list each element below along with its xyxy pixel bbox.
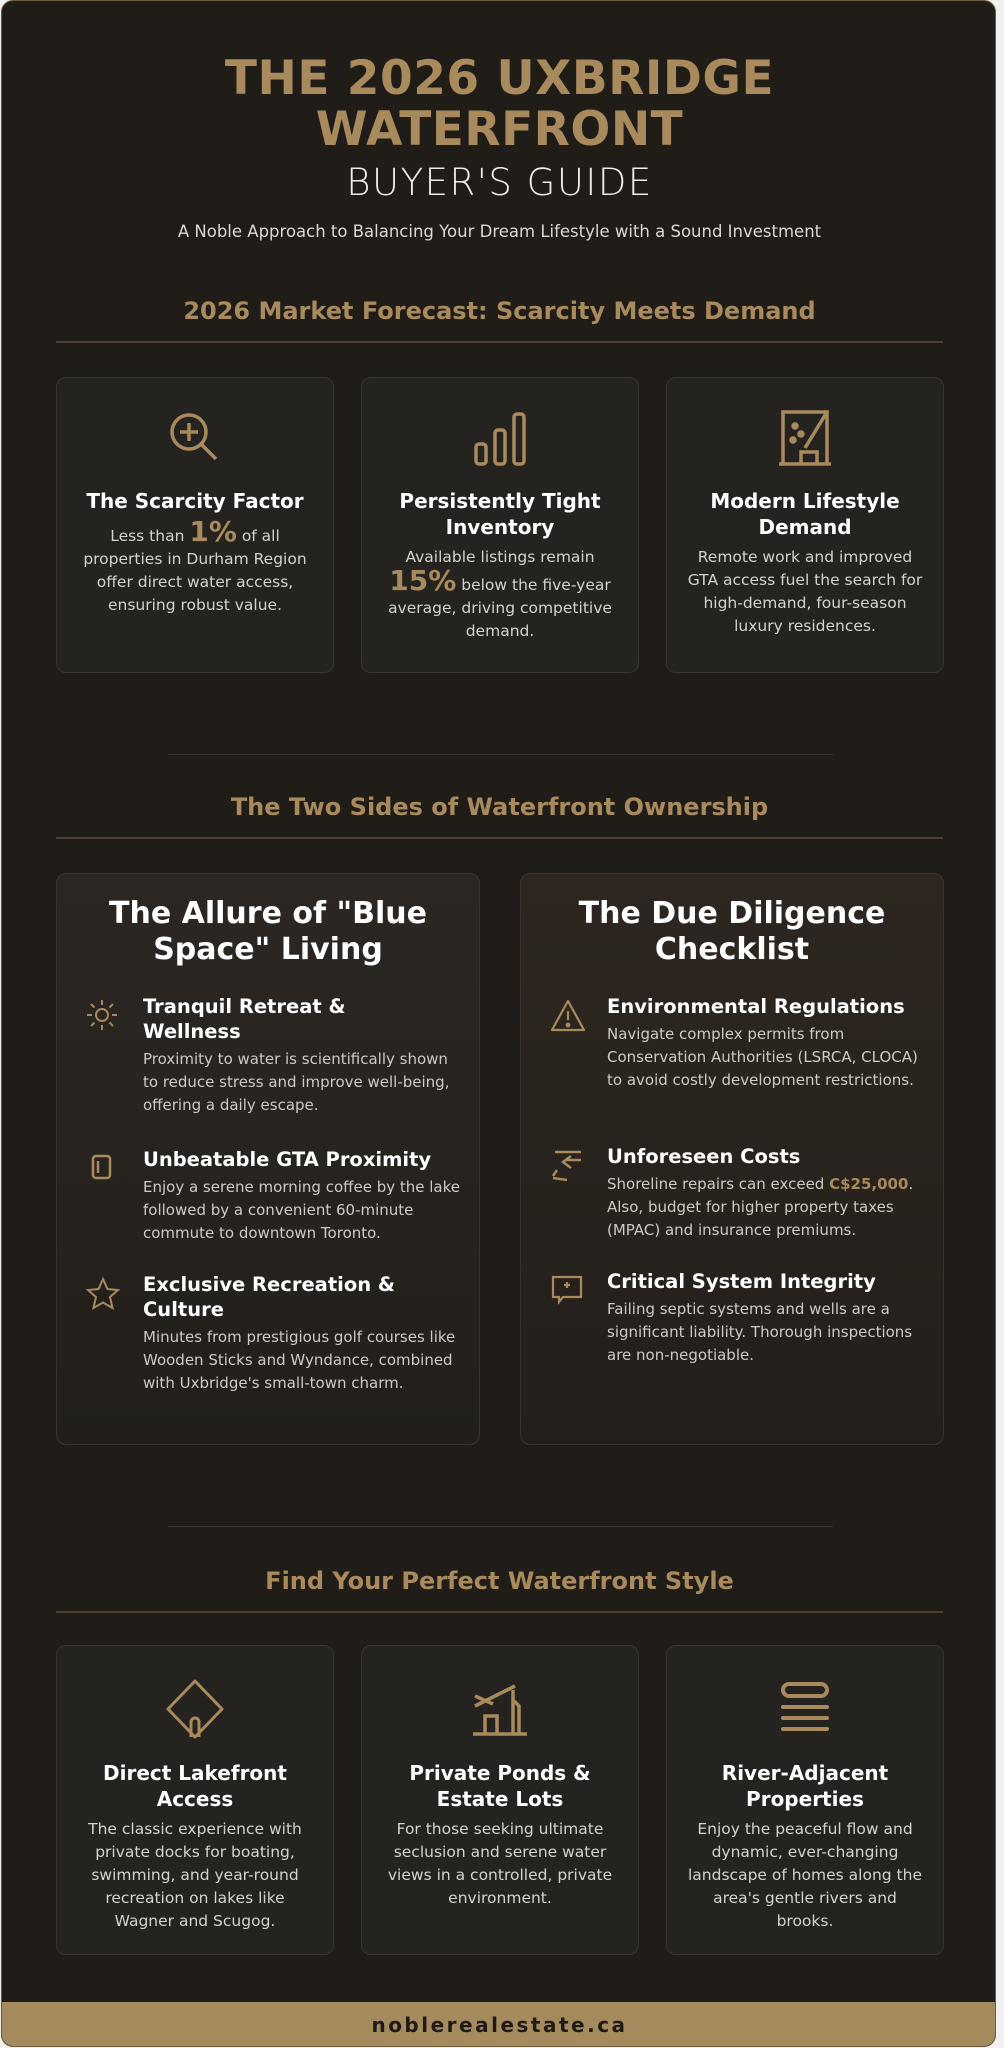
item: system integrity [552, 1270, 912, 1364]
icon: warning [550, 1000, 586, 1032]
footer [2, 2002, 997, 2048]
panel: due diligence: Critical System Integrity [607, 1270, 876, 1293]
title: WATERFRONT [316, 102, 683, 157]
card: direct lakefront [56, 1645, 334, 1955]
panel: due diligence [520, 873, 944, 1445]
title [225, 51, 774, 204]
card: river-adjacent: Enjoy the peaceful flow and dynamic, ever-changing landscape of homes along the area's gentle rivers and brooks. [688, 1820, 922, 1930]
card: tight inventory [361, 377, 639, 673]
icon: magnifier [170, 413, 218, 460]
footer: noblerealestate.ca [371, 2013, 628, 2037]
panel: blue space living: Space" Living [153, 932, 383, 967]
icon: bar chart [474, 412, 526, 466]
heading: two sides: The Two Sides of Waterfront Ownership [231, 793, 768, 821]
card: private ponds: For those seeking ultimate seclusion and serene water views in a controlled, private environment. [388, 1820, 612, 1907]
icon: building [779, 410, 831, 466]
item: tranquil retreat [87, 995, 449, 1114]
card: scarcity factor [56, 377, 334, 673]
card: scarcity factor: Less than 1% of all properties in Durham Region offer direct water access, ensuring robust value. [83, 515, 307, 614]
card: direct lakefront: The classic experience with private docks for boating, swimming, and year-round recreation on lakes like Wagner and Scugog. [88, 1820, 302, 1930]
panel: blue space living: Culture [143, 1298, 224, 1321]
icon: waves [781, 1682, 829, 1731]
item: unforeseen costs [552, 1145, 913, 1239]
icon: estate [473, 1684, 527, 1736]
item: GTA proximity [92, 1148, 460, 1242]
heading: waterfront style: Find Your Perfect Waterfront Style [265, 1567, 734, 1595]
icon: star [86, 1276, 120, 1310]
card: lifestyle demand [666, 377, 944, 673]
panel: blue space living: Unbeatable GTA Proximity [143, 1148, 431, 1171]
panel: blue space living: Exclusive Recreation & [143, 1273, 395, 1296]
title: BUYER'S GUIDE [346, 161, 653, 204]
panel: blue space living: The Allure of "Blue [109, 896, 427, 931]
panel: due diligence: Unforeseen Costs [607, 1145, 800, 1168]
card: river-adjacent: River-Adjacent Properties [722, 1761, 888, 1811]
panel: blue space living: Tranquil Retreat & [143, 995, 346, 1018]
card: lifestyle demand: Modern Lifestyle Demand [710, 489, 900, 539]
panel: due diligence: Navigate complex permits from Conservation Authorities (LSRCA, CLOCA) to avoid costly development restrictions. [607, 1025, 918, 1089]
card: tight inventory: Persistently Tight Inventory [399, 489, 601, 539]
card: scarcity factor: The Scarcity Factor [86, 489, 304, 513]
panel: blue space living: Wellness [143, 1020, 241, 1043]
card: lifestyle demand: Remote work and improved GTA access fuel the search for high-demand, four-season luxury residences. [688, 548, 922, 635]
card: river-adjacent [666, 1645, 944, 1955]
subtitle: A Noble Approach to Balancing Your Dream Lifestyle with a Sound Investment [178, 222, 821, 241]
panel: due diligence: Failing septic systems and wells are a significant liability. Thorough inspections are non-negotiable. [607, 1300, 912, 1364]
icon: phone [92, 1154, 112, 1180]
item: environmental [550, 995, 918, 1089]
card: tight inventory: Available listings remain 15% below the five-year average, driving competitive demand. [388, 548, 612, 640]
panel: blue space living: Minutes from prestigious golf courses like Wooden Sticks and Wyndance, combined with Uxbridge's small-town charm. [143, 1328, 455, 1392]
panel: due diligence: The Due Diligence [579, 896, 885, 931]
item: recreation [86, 1273, 455, 1392]
panel: blue space living [56, 873, 480, 1445]
card: private ponds: Private Ponds & Estate Lots [409, 1761, 591, 1811]
heading: market forecast: 2026 Market Forecast: Scarcity Meets Demand [183, 297, 816, 325]
icon: costs [552, 1150, 581, 1182]
icon: diamond [166, 1679, 224, 1739]
card: private ponds [361, 1645, 639, 1955]
panel: blue space living: Enjoy a serene morning coffee by the lake followed by a convenient 60-minute commute to downtown Toronto. [143, 1178, 460, 1242]
title: THE 2026 UXBRIDGE [225, 51, 774, 106]
panel: due diligence: Shoreline repairs can exceed C$25,000. Also, budget for higher property taxes (MPAC) and insurance premiums. [607, 1175, 913, 1239]
panel: due diligence: Environmental Regulations [607, 995, 905, 1018]
card: direct lakefront: Direct Lakefront Access [103, 1761, 287, 1811]
icon: tank [552, 1276, 582, 1305]
panel: due diligence: Checklist [655, 932, 809, 967]
panel: blue space living: Proximity to water is scientifically shown to reduce stress and improve well-being, offering a daily escape. [143, 1050, 449, 1114]
icon: sun [87, 1000, 117, 1030]
